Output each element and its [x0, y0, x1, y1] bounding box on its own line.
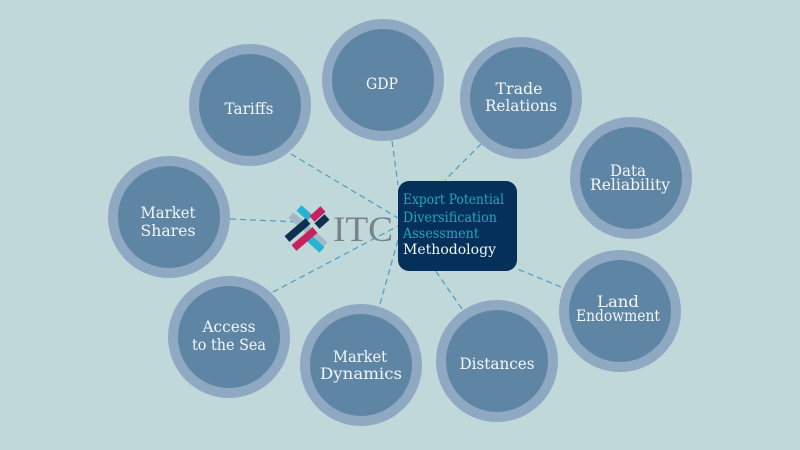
circle: Distances	[436, 300, 558, 422]
circle: GDP	[322, 19, 444, 141]
logo: ITC	[287, 208, 393, 250]
circle: Access to the Sea	[168, 276, 290, 398]
central box: methodology: Diversification	[403, 210, 497, 226]
dashed connectors	[230, 141, 561, 309]
circle: Tariffs: Tariffs	[224, 99, 274, 118]
circle: Market Dynamics: Market	[333, 347, 388, 366]
logo mark	[287, 208, 327, 250]
circle: Data Reliability: Data	[610, 161, 646, 180]
circle: Land Endowment: Endowment	[576, 306, 660, 325]
circle: Land Endowment: Land	[597, 292, 639, 311]
circle: Access to the Sea: to the Sea	[192, 335, 266, 354]
circle: GDP: GDP	[366, 74, 398, 93]
circle: Trade Relations: Relations	[485, 96, 557, 115]
circle: Market Shares	[108, 156, 230, 278]
circle: Land Endowment	[559, 250, 681, 372]
circle: Access to the Sea: Access	[202, 317, 256, 336]
box title lines: Export Potential	[403, 192, 504, 208]
circle: Market Dynamics: Dynamics	[320, 364, 402, 383]
circle: Tariffs	[189, 44, 311, 166]
circle: Trade Relations	[460, 37, 582, 159]
circle: Trade Relations: Trade	[496, 79, 542, 98]
circle: Market Shares: Shares	[140, 221, 196, 240]
circle: Distances: Distances	[460, 354, 534, 373]
central box: methodology	[398, 181, 517, 271]
circle: Market Shares: Market	[140, 203, 196, 222]
circle: Market Dynamics	[300, 304, 422, 426]
circle: Data Reliability	[570, 117, 692, 239]
central box: methodology: Methodology	[403, 242, 496, 258]
central box: methodology: Assessment	[402, 226, 479, 242]
circle: Data Reliability: Reliability	[590, 175, 670, 194]
logo wordmark: ITC	[333, 209, 393, 249]
